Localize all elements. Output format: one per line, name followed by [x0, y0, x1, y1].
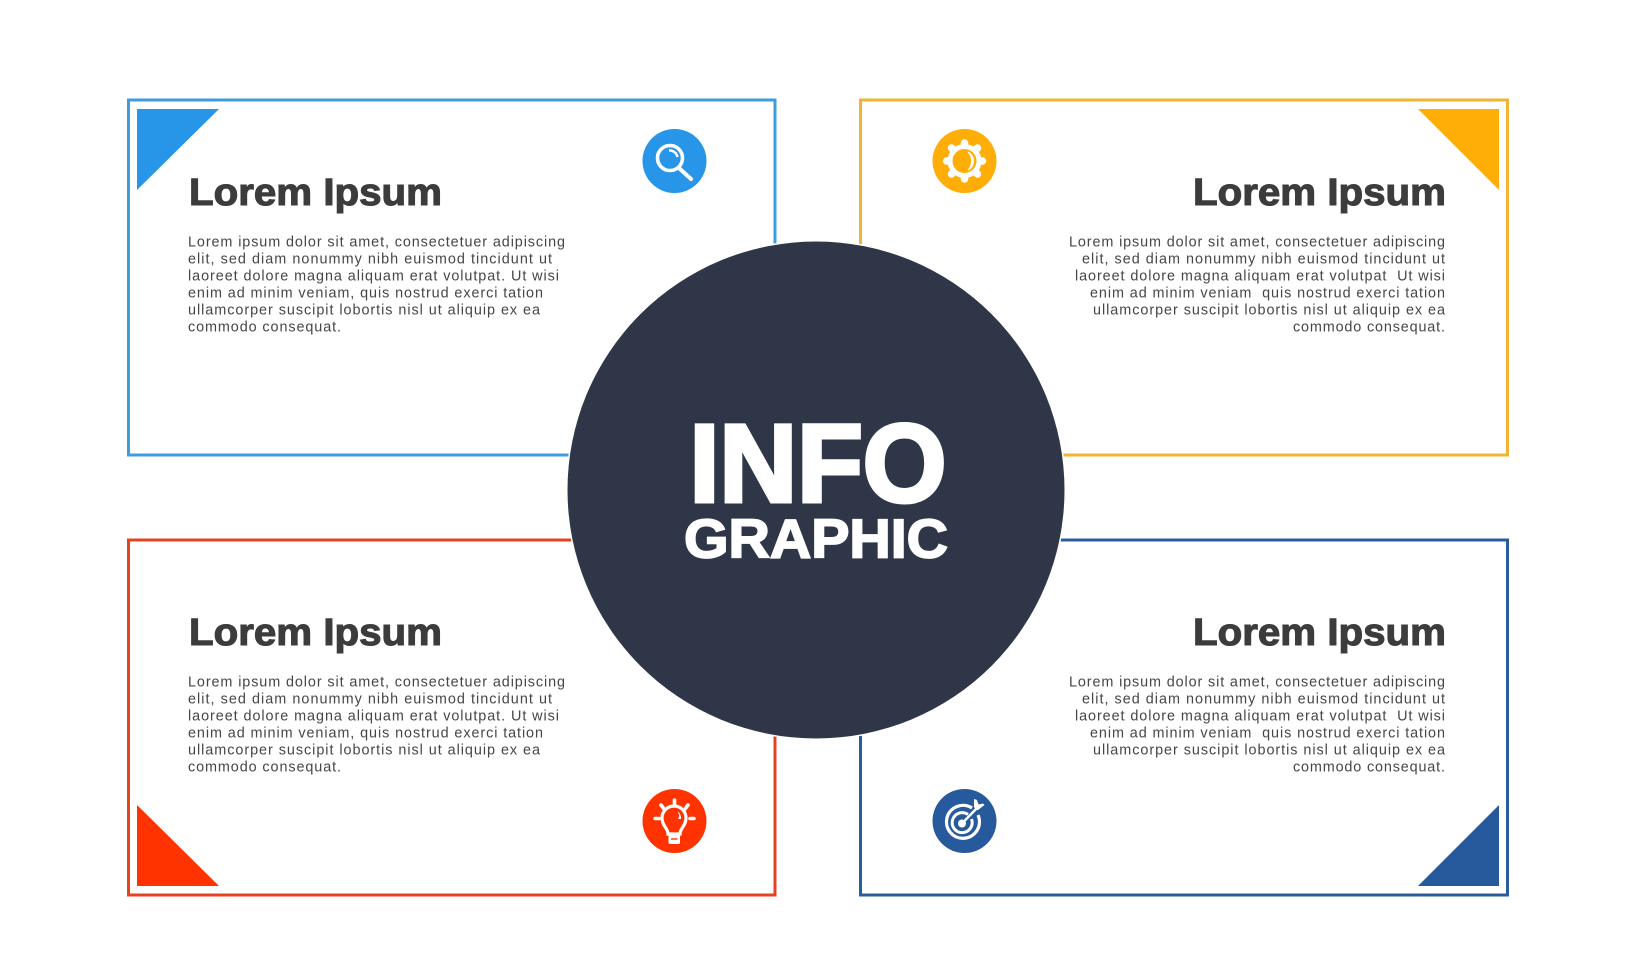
body text: navy panel: Lorem ipsum dolor sit amet, consectetuer adipiscing — [1069, 674, 1445, 690]
blue panel frame — [128, 100, 775, 455]
yellow corner triangle — [1418, 109, 1499, 190]
body text: yellow panel: elit, sed diam nonummy nibh euismod tincidunt ut — [1082, 252, 1445, 268]
panel: top right (yellow) — [860, 100, 1508, 455]
heading: blue panel: Lorem Ipsum — [189, 172, 442, 214]
panel: top left (blue) — [128, 100, 775, 455]
blue corner triangle — [137, 109, 219, 190]
body text: red panel: commodo consequat. — [188, 760, 341, 776]
icon: magnifying glass — [642, 129, 706, 193]
body text: yellow panel: enim ad minim veniam quis nostrud exerci tation — [1090, 286, 1445, 302]
body text: blue panel: laoreet dolore magna aliquam erat volutpat. Ut wisi — [188, 268, 559, 284]
body text: red panel: elit, sed diam nonummy nibh euismod tincidunt ut — [188, 692, 552, 708]
body text: blue panel: enim ad minim veniam, quis nostrud exerci tation — [188, 286, 543, 302]
red panel frame — [128, 540, 775, 895]
body text: yellow panel: Lorem ipsum dolor sit amet, consectetuer adipiscing — [1069, 234, 1445, 250]
body text: red panel: laoreet dolore magna aliquam erat volutpat. Ut wisi — [188, 708, 559, 724]
navy corner triangle — [1418, 805, 1499, 886]
body text: red panel: enim ad minim veniam, quis nostrud exerci tation — [188, 726, 543, 742]
body text: yellow panel: ullamcorper suscipit lobortis nisl ut aliquip ex ea — [1093, 302, 1445, 318]
body text: yellow panel: commodo consequat. — [1293, 320, 1445, 336]
body text: navy panel: enim ad minim veniam quis nostrud exerci tation — [1090, 726, 1445, 742]
title: GRAPHIC: GRAPHIC — [684, 508, 948, 570]
icon: light bulb — [642, 789, 706, 853]
title: INFO: INFO — [690, 402, 946, 526]
icon: gear — [932, 129, 996, 193]
body text: red panel — [188, 674, 565, 776]
body text: blue panel: Lorem ipsum dolor sit amet, consectetuer adipiscing — [188, 234, 565, 250]
body text: blue panel: elit, sed diam nonummy nibh euismod tincidunt ut — [188, 252, 552, 268]
body text: yellow panel — [1069, 234, 1445, 336]
heading: red panel: Lorem Ipsum — [189, 612, 442, 654]
icon: target with arrow — [932, 789, 996, 853]
center circle — [566, 240, 1066, 740]
body text: navy panel: commodo consequat. — [1293, 760, 1445, 776]
body text: blue panel — [188, 234, 565, 336]
body text: navy panel: ullamcorper suscipit lobortis nisl ut aliquip ex ea — [1093, 742, 1445, 758]
heading: navy panel: Lorem Ipsum — [1193, 612, 1446, 654]
heading: yellow panel: Lorem Ipsum — [1193, 172, 1446, 214]
body text: red panel: ullamcorper suscipit lobortis nisl ut aliquip ex ea — [188, 742, 540, 758]
body text: navy panel — [1069, 674, 1445, 776]
body text: yellow panel: laoreet dolore magna aliquam erat volutpat Ut wisi — [1075, 268, 1445, 284]
red corner triangle — [137, 805, 219, 886]
navy panel frame — [860, 540, 1508, 895]
body text: blue panel: commodo consequat. — [188, 320, 341, 336]
panel: bottom left (red) — [128, 540, 775, 895]
panel: bottom right (navy blue) — [860, 540, 1508, 895]
body text: blue panel: ullamcorper suscipit lobortis nisl ut aliquip ex ea — [188, 302, 540, 318]
yellow panel frame — [860, 100, 1508, 455]
body text: navy panel: elit, sed diam nonummy nibh euismod tincidunt ut — [1082, 692, 1445, 708]
body text: red panel: Lorem ipsum dolor sit amet, consectetuer adipiscing — [188, 674, 565, 690]
body text: navy panel: laoreet dolore magna aliquam erat volutpat Ut wisi — [1075, 708, 1445, 724]
